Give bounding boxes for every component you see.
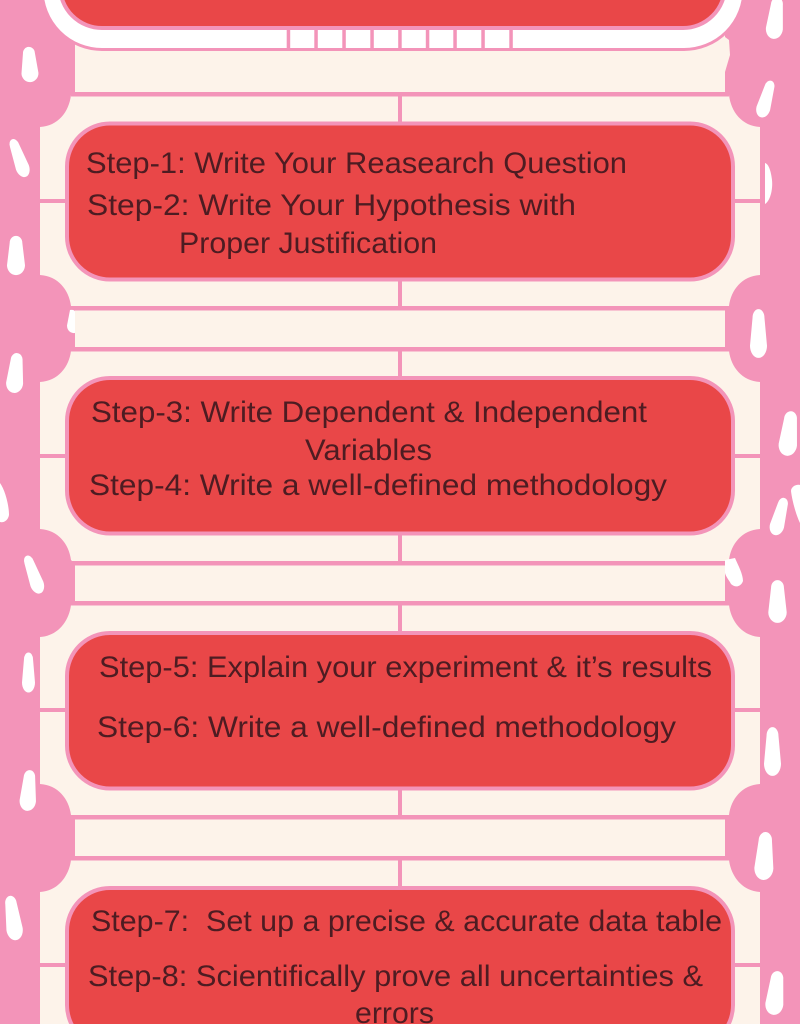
red box <box>67 888 733 1024</box>
right pink scalloped edge <box>725 0 800 892</box>
step 3 continuation: Variables <box>305 434 432 467</box>
step 8 text: Step-8: Scientifically prove all uncertainties & <box>88 960 703 993</box>
step 4 text: Step-4: Write a well-defined methodology <box>89 469 667 502</box>
step 5 text: Step-5: Explain your experiment & it’s results <box>99 651 712 684</box>
red box <box>67 633 733 788</box>
connector lines <box>40 92 760 967</box>
panel: steps 7 and 8 <box>67 888 733 1024</box>
step 7 text: Step-7: Set up a precise & accurate data table <box>91 905 722 938</box>
step 3 text: Step-3: Write Dependent & Independent <box>91 396 648 429</box>
red box <box>67 378 733 534</box>
red header box <box>60 0 725 28</box>
panel: steps 5 and 6 <box>67 633 733 788</box>
frame ticks <box>287 30 513 48</box>
red box <box>67 124 733 280</box>
white frame <box>42 0 744 50</box>
top header panel <box>42 0 744 50</box>
left pink scalloped edge <box>0 0 75 892</box>
panel: steps 1 and 2 <box>67 124 733 280</box>
step 1 text: Step-1: Write Your Reasearch Question <box>86 147 627 180</box>
panel: steps 3 and 4 <box>67 378 733 534</box>
step 2 continuation: Proper Justification <box>179 227 437 260</box>
step 6 text: Step-6: Write a well-defined methodology <box>97 711 676 744</box>
step 2 text: Step-2: Write Your Hypothesis with <box>87 189 576 222</box>
